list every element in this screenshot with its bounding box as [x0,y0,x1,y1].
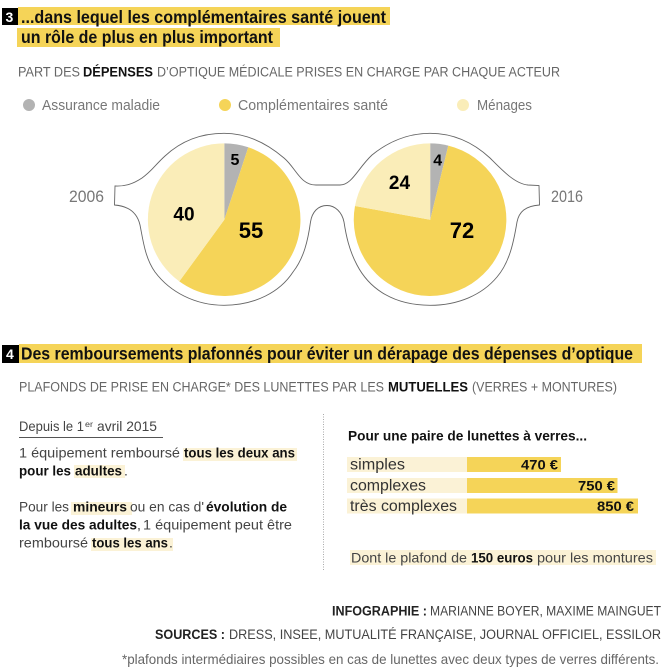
pie chart: 2006: 5 [231,152,240,169]
text block: rules since 2015: adultes [75,462,122,478]
text block: rules since 2015: mineurs [73,498,127,514]
subtitle: plafonds: PLAFONDS DE PRISE EN CHARGE* DES LUNETTES PAR LES [19,380,384,394]
text block: rules since 2015: ou en cas d' [130,498,204,514]
text block: rules since 2015: , [137,516,141,532]
callout: frames ceiling [350,550,656,566]
callout: frames ceiling: 150 euros [471,550,533,566]
text block: rules since 2015: remboursé [19,534,88,550]
text block: rules since 2015: évolution de [206,498,287,514]
bar chart: ceilings: 850 € [597,498,634,514]
text block: rules since 2015 [19,418,297,551]
bar chart: ceilings: complexes [350,478,426,494]
credits [155,604,661,642]
text block: rules since 2015: . [124,462,128,478]
bar chart: ceilings: très complexes [350,498,457,515]
subtitle: plafonds: (VERRES + MONTURES) [472,380,617,394]
pie chart: 2016: 72 [450,218,474,243]
heading: section 3 [2,7,390,47]
pie chart: 2016 [354,143,506,296]
text block: rules since 2015: 1 équipement peut être [143,516,292,532]
text block: rules since 2015: pour les [19,462,71,478]
text block: rules since 2015: avril 2015 [97,418,157,434]
bar chart: ceilings: 750 € [578,478,615,494]
callout: frames ceiling: pour les montures [537,550,653,566]
subtitle: plafonds [19,380,617,394]
pie chart: 2006: 40 [173,204,195,226]
bar chart: ceilings: 470 € [521,456,558,472]
subtitle: part des dépenses: DÉPENSES [83,64,153,80]
legend: Assurance maladie [42,98,160,114]
pie chart: 2016: 4 [433,152,442,170]
heading: pour une paire de lunettes: Pour une paire de lunettes à verres... [348,428,587,444]
pie chart: 2006: 55 [239,218,263,243]
pie chart: 2006 [148,143,300,296]
heading: section 3: 3 [6,9,14,25]
subtitle: plafonds: MUTUELLES [388,380,468,394]
credits: SOURCES : [155,627,225,642]
heading: section 4: 4 [6,346,14,362]
text block: rules since 2015: . [169,534,173,550]
callout: frames ceiling: Dont le plafond de [351,550,467,566]
label: 2006: 2006 [69,187,104,206]
subtitle: part des dépenses: D’OPTIQUE MÉDICALE PRISES EN CHARGE PAR CHAQUE ACTEUR [157,64,560,80]
text block: rules since 2015: er [85,420,93,429]
bar chart: ceilings [347,456,638,515]
legend: Ménages [477,98,532,114]
text block: rules since 2015: la vue des adultes [19,516,137,532]
text block: rules since 2015: Pour les [19,498,69,514]
heading: section 3: un rôle de plus en plus important [21,27,273,47]
label: 2016: 2016 [551,187,583,206]
pie chart: 2016: 24 [389,173,410,194]
credits: INFOGRAPHIE : [332,604,427,618]
bar chart: ceilings: simples [350,456,405,474]
text block: rules since 2015: 1 équipement remboursé [19,444,180,460]
text block: rules since 2015: Depuis le 1 [19,418,84,434]
heading: section 3: ...dans lequel les complémentaires santé jouent [21,7,386,27]
legend: Complémentaires santé [238,98,388,114]
legend [23,98,532,114]
text block: rules since 2015: tous les ans [92,534,168,550]
text block: rules since 2015: tous les deux ans [184,444,295,460]
glasses frame [114,133,540,305]
subtitle: part des dépenses: PART DES [18,64,80,80]
